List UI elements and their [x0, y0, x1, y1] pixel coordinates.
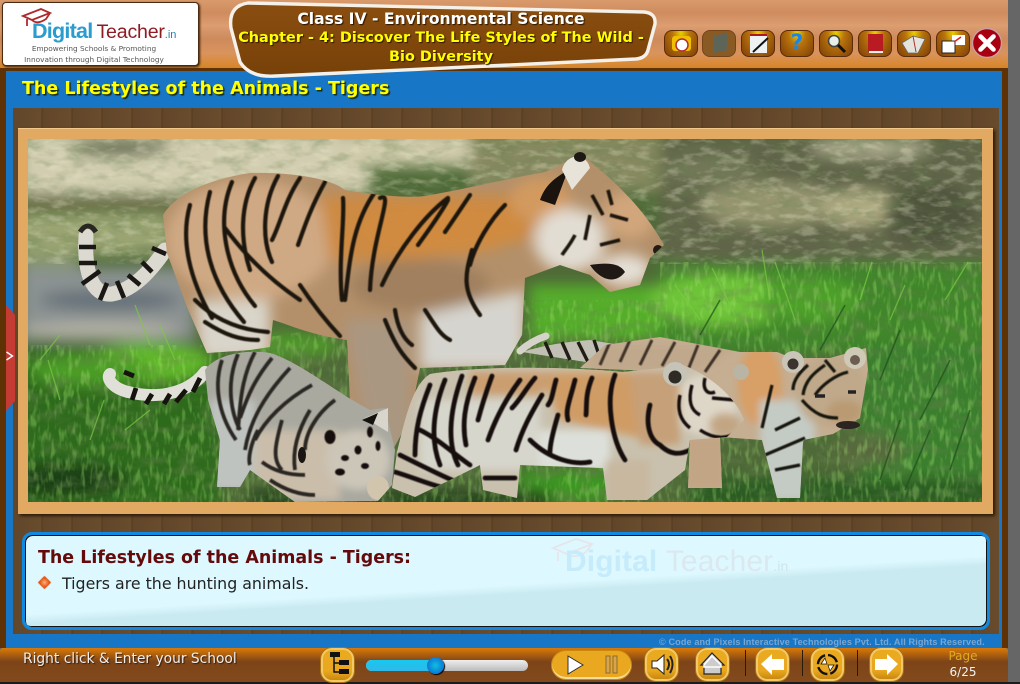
watermark wordmark: Digital Teacher.in: [565, 545, 788, 578]
icon: speaker button: [645, 648, 678, 681]
play and pause pill: [551, 650, 632, 680]
foreground grass: [40, 250, 968, 440]
logo tagline: [24, 44, 164, 64]
watermark logo: [551, 538, 788, 578]
slider knob: [427, 657, 444, 674]
icon: dictionary: [858, 30, 892, 57]
logo tagline: Innovation through Digital Technology: [24, 55, 164, 64]
photo frame: [18, 128, 993, 514]
page counter: [948, 649, 978, 678]
photo: tigress with three cubs: [28, 139, 982, 502]
divider: [745, 650, 746, 676]
page counter: 6/25: [950, 664, 976, 678]
chapter title text: Bio Diversity: [389, 48, 493, 64]
icon: magnifier: [819, 30, 853, 57]
icon: graduation cap: [21, 8, 52, 26]
icon: back arrow button: [756, 648, 789, 681]
icon: close button: [972, 28, 1002, 58]
divider: [802, 650, 803, 676]
bottom wooden control bar: [0, 648, 1008, 682]
icon: orange diamond bullet: [38, 576, 51, 589]
information box: [22, 532, 990, 630]
left cub: [109, 345, 400, 505]
icon: help question mark: ?: [791, 31, 803, 56]
slide heading: The Lifestyles of the Animals - Tigers: [22, 79, 389, 99]
school name prompt: Right click & Enter your School: [23, 651, 237, 667]
logo tagline: Empowering Schools & Promoting: [32, 44, 156, 53]
tigress ear: [562, 156, 590, 190]
tigress tail: [86, 236, 165, 294]
bullet sentence: Tigers are the hunting animals.: [62, 574, 309, 593]
icon: window resize: [936, 30, 970, 57]
audio progress slider: [366, 657, 528, 676]
bullet text: [38, 574, 309, 593]
logo wordmark: DigitalTeacher.in: [32, 19, 176, 43]
middle cub: [392, 362, 749, 500]
icon: replay button: [811, 648, 844, 681]
background ground and grass: [0, 132, 990, 513]
icon: outline tree button: [321, 648, 354, 682]
red side menu tab: [6, 305, 15, 411]
divider: [857, 650, 858, 676]
chapter title text: Class IV - Environmental Science: [297, 10, 585, 28]
copyright line: © Code and Pixels Interactive Technologies Pvt. Ltd. All Rights Reserved.: [659, 637, 985, 647]
icon: notepad: [741, 30, 775, 57]
toolbar icons: [664, 28, 1002, 58]
info box heading: The Lifestyles of the Animals - Tigers:: [38, 548, 411, 568]
icon: help question mark: [780, 30, 814, 57]
icon: pause: [606, 656, 618, 674]
tigress: [79, 150, 680, 470]
icon: home button: [696, 648, 729, 681]
icon: clock folder: [664, 30, 698, 57]
icon: next arrow button: [870, 648, 903, 681]
page counter: Page: [948, 649, 978, 663]
tigress stripes: [186, 176, 505, 368]
icon: play: [568, 655, 584, 675]
icon: reference book: [702, 30, 736, 57]
logo card: [2, 2, 199, 66]
control buttons: [320, 647, 978, 683]
watermark cap: [551, 538, 594, 561]
chapter title plaque: [228, 1, 657, 78]
chapter title text: Chapter - 4: Discover The Life Styles of The Wild -: [238, 30, 644, 46]
wood plank content panel: [13, 108, 999, 634]
icon: open book: [897, 30, 931, 57]
bottom edge: [0, 682, 1020, 684]
chapter title text: [238, 10, 644, 66]
top wooden header bar: [0, 0, 1008, 71]
right cub: [516, 332, 868, 498]
